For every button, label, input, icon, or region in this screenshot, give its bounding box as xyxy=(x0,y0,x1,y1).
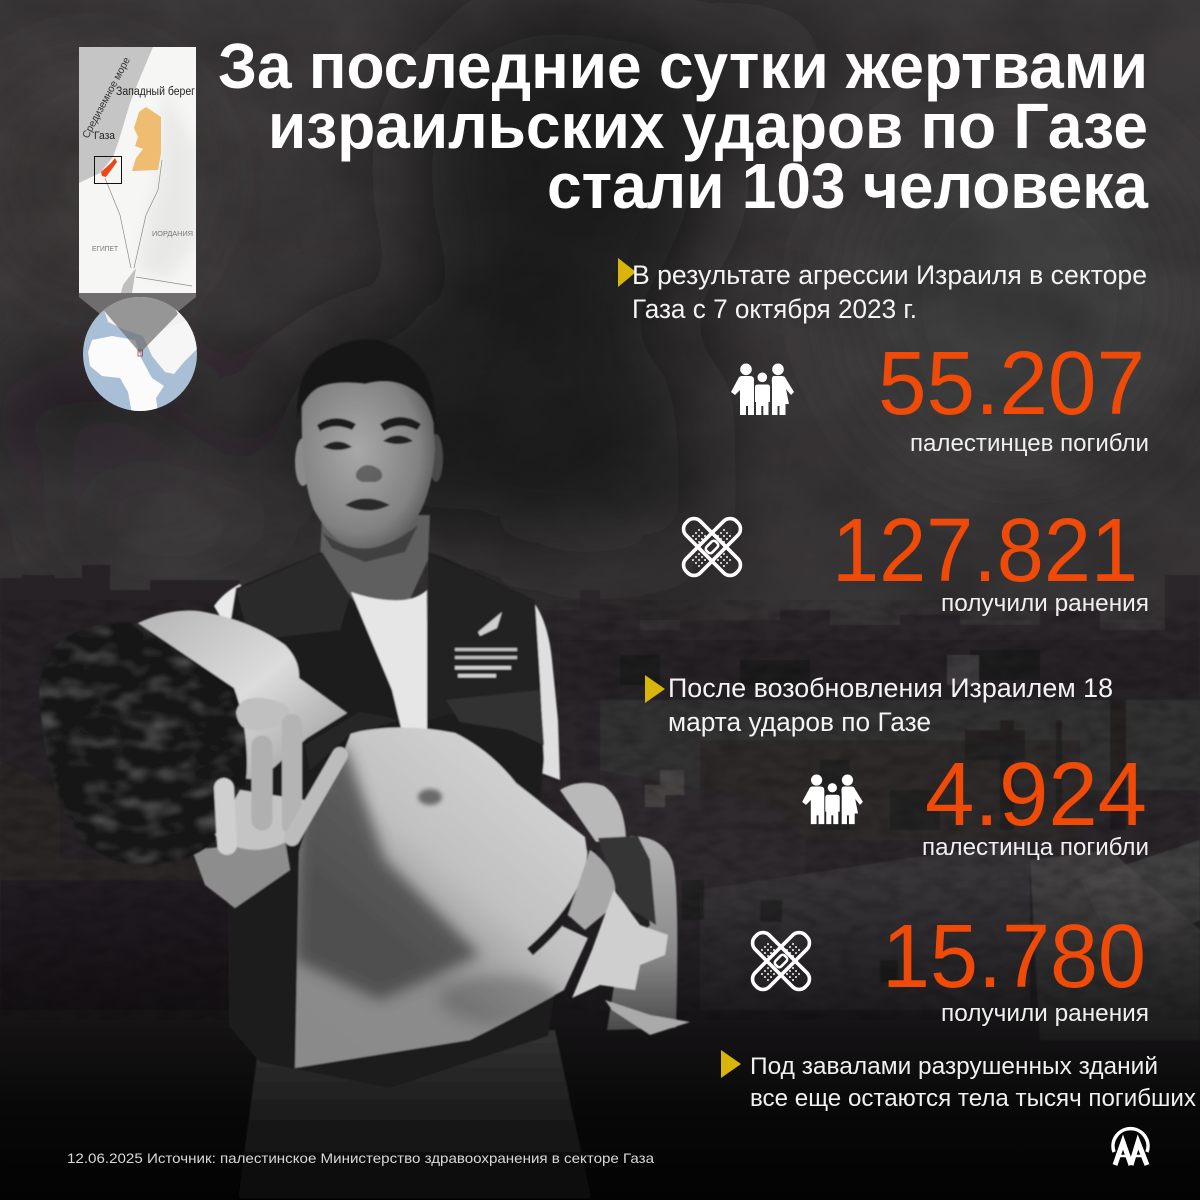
skyline right xyxy=(540,575,1200,1200)
stat: wounded since March: получили ранения xyxy=(941,1000,1149,1027)
map label: Gaza: Газа xyxy=(94,130,116,142)
man's hand on boy's head xyxy=(215,724,340,850)
callout: bodies under rubble xyxy=(721,1050,1196,1112)
title: стали 103 человека xyxy=(547,150,1148,222)
eyes xyxy=(323,442,352,450)
map label: Egypt: ЕГИПЕТ xyxy=(92,244,118,253)
mouth xyxy=(345,498,390,510)
map label: sea: Средиземное море xyxy=(80,55,133,140)
eyebrows xyxy=(317,418,356,431)
man's forearm xyxy=(192,840,290,908)
stat: killed since March: 4.924 xyxy=(925,745,1147,845)
map: Gulf of Aqaba xyxy=(121,268,136,293)
icon: bandage, wounded since March xyxy=(749,929,813,993)
title xyxy=(218,30,1148,222)
vest logo xyxy=(455,606,517,678)
globe: map footprint shadow xyxy=(100,296,178,353)
vest xyxy=(226,552,560,1088)
man's collar strap xyxy=(305,712,400,770)
map: West Bank xyxy=(132,107,161,171)
callout: since 7 October 2023 xyxy=(618,258,1147,324)
stat: total killed: палестинцев погибли xyxy=(910,430,1149,457)
boy's arm and man's right hand xyxy=(568,850,690,1035)
boy's legs xyxy=(560,783,677,1030)
stat: wounded since March: 15.780 xyxy=(882,907,1146,1007)
callout: since 7 October 2023: В результате агрессии Израиля в секторе xyxy=(632,260,1147,290)
right white sleeve xyxy=(528,600,560,780)
title: За последние сутки жертвами xyxy=(218,30,1148,102)
title: израильских ударов по Газе xyxy=(268,90,1148,162)
white t-shirt xyxy=(351,590,427,768)
callout: bodies under rubble: Под завалами разрушенных зданий xyxy=(750,1053,1158,1080)
map: inset box xyxy=(94,156,122,184)
icon: family, total killed xyxy=(731,364,794,415)
shirt sleeve hem xyxy=(530,850,592,952)
nose xyxy=(356,465,382,482)
man's face xyxy=(295,339,443,562)
globe: Asia xyxy=(143,316,198,374)
hair xyxy=(297,339,436,430)
connector wedge xyxy=(79,293,196,318)
map: borders xyxy=(105,160,192,286)
globe: Africa xyxy=(88,336,164,414)
boy's ear xyxy=(236,698,290,730)
vest pocket xyxy=(446,690,544,745)
stat: killed since March: палестинца погибли xyxy=(922,834,1149,861)
map: terrain shading xyxy=(142,112,194,274)
map label: West Bank: Западный берег xyxy=(116,86,195,98)
globe locator xyxy=(79,293,198,414)
footer source line: 12.06.2025 Источник: палестинское Министерство здравоохранения в секторе Газа xyxy=(67,1150,654,1166)
boy's hair xyxy=(38,622,248,865)
icon: family, killed since March xyxy=(802,774,863,824)
skyline left xyxy=(0,565,300,1200)
callout: since 18 March: После возобновления Израилем 18 xyxy=(668,673,1113,703)
map panel xyxy=(79,47,196,293)
callout: bodies under rubble: все еще остаются тела тысяч погибших xyxy=(750,1085,1196,1112)
callout: since 18 March: марта ударов по Газе xyxy=(668,707,931,737)
globe: Europe xyxy=(104,297,186,336)
neck xyxy=(320,515,430,610)
globe: location marker xyxy=(138,350,142,356)
left white sleeve xyxy=(214,584,262,650)
main figure: rescuer carrying injured boy xyxy=(30,339,690,1200)
logo: Anadolu Agency xyxy=(1113,1129,1148,1165)
stat: total killed: 55.207 xyxy=(878,334,1145,434)
stat: total wounded: получили ранения xyxy=(941,590,1149,617)
map: Mediterranean sea xyxy=(79,47,153,183)
map label: Jordan: ИОРДАНИЯ xyxy=(152,229,193,238)
stat: total wounded: 127.821 xyxy=(832,501,1138,601)
map: Gaza Strip xyxy=(101,158,117,177)
trousers xyxy=(238,1030,592,1200)
callout: since 7 October 2023: Газа с 7 октября 2023 г. xyxy=(632,294,917,324)
callout: since 18 March xyxy=(645,673,1113,737)
boy's face and neck xyxy=(138,610,347,780)
icon: bandage, total wounded xyxy=(680,515,744,579)
boy's shirt xyxy=(290,720,600,1080)
